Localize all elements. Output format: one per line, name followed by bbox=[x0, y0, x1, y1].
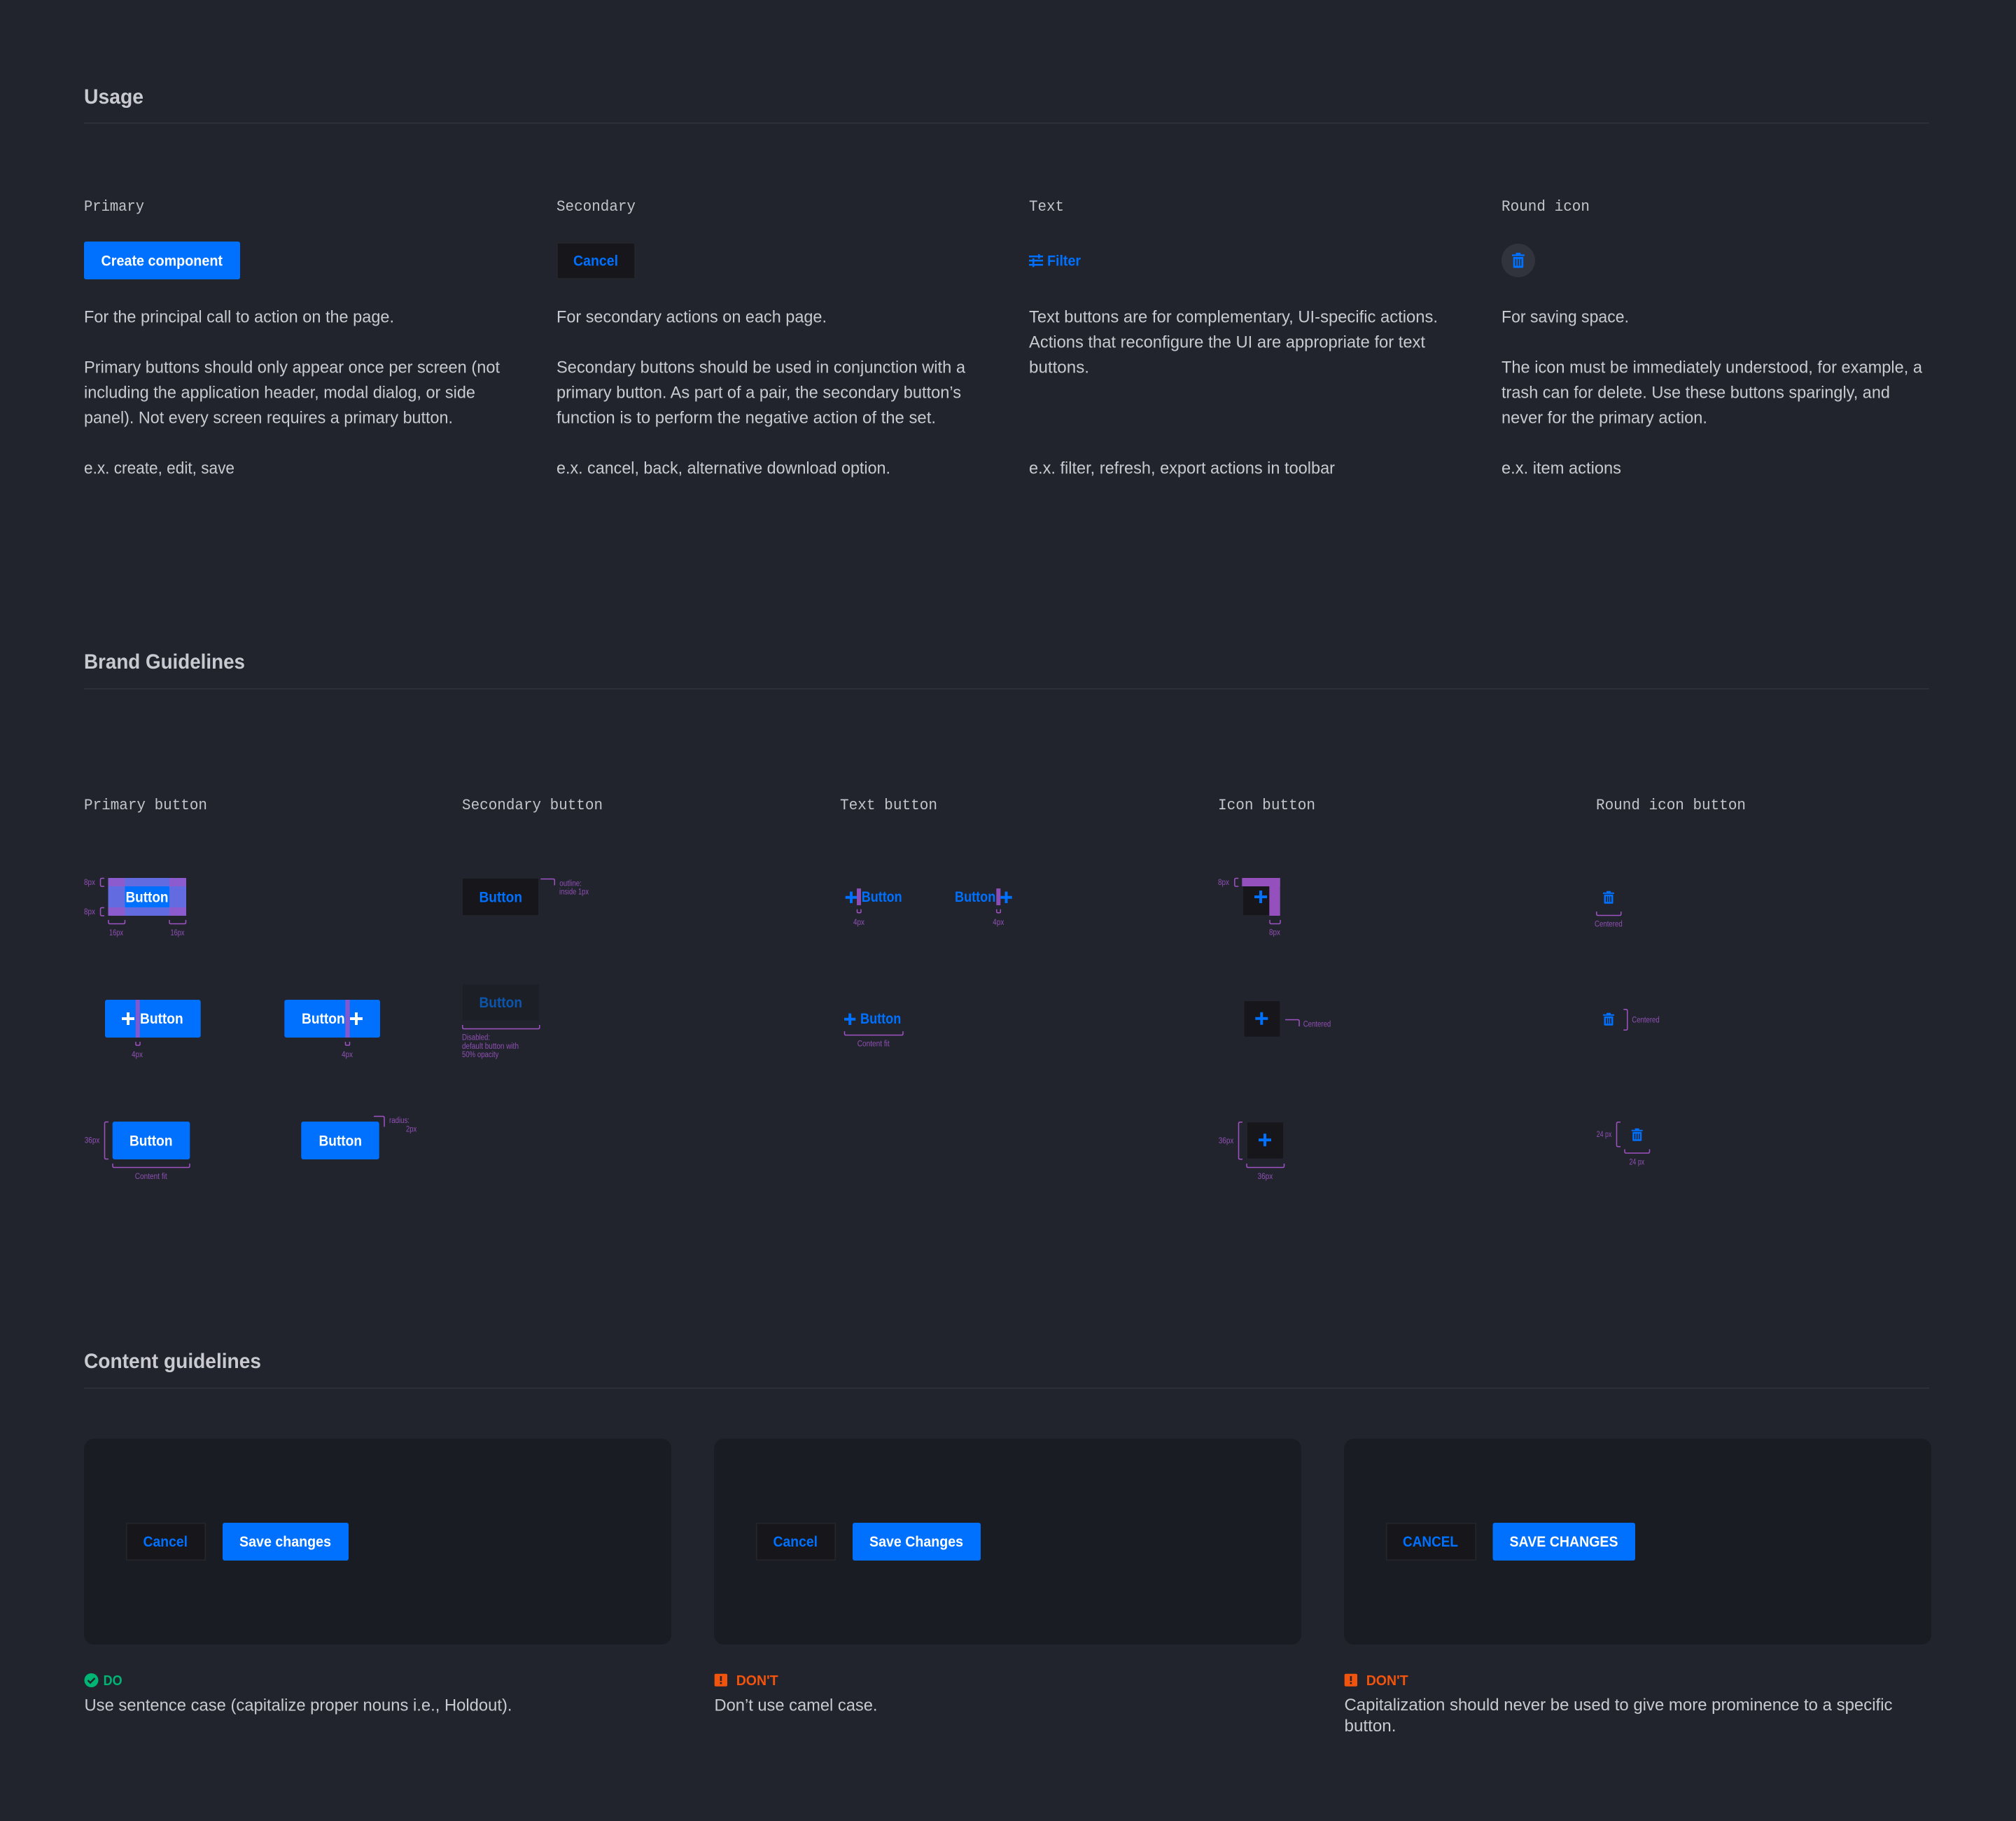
spec: height and content fit: Button bbox=[130, 1133, 172, 1150]
button: cancel: Cancel bbox=[773, 1534, 818, 1550]
spec: leading icon gap: 4px bbox=[132, 1051, 143, 1059]
section: content guidelines bbox=[84, 1350, 1931, 1736]
spec: leading icon gap: 4px bbox=[853, 919, 864, 927]
text: text button description: Actions that reconfigure the UI are appropriate for text bbox=[1029, 333, 1425, 351]
text: primary description bbox=[84, 308, 500, 477]
button: cancel: Cancel bbox=[143, 1534, 188, 1550]
heading: brand guidelines: Brand Guidelines bbox=[84, 650, 245, 674]
button: filter bbox=[1029, 253, 1081, 269]
text: primary description: For the principal call to action on the page. bbox=[84, 308, 394, 326]
text: don't description bbox=[1344, 1696, 1893, 1736]
button: save changes bbox=[223, 1523, 349, 1561]
spec: outline: Button bbox=[479, 889, 522, 906]
subheading: round icon: Round icon bbox=[1502, 198, 1590, 216]
text: don't description: Don’t use camel case. bbox=[714, 1696, 878, 1715]
subheading: secondary button: Secondary button bbox=[462, 797, 603, 814]
spec: disabled: Disabled: bbox=[462, 1033, 490, 1042]
spec: trailing icon gap bbox=[955, 888, 1012, 927]
spec: padding: 8px bbox=[84, 908, 95, 916]
text: text button description bbox=[1029, 308, 1438, 477]
spec: content fit: Content fit bbox=[858, 1040, 890, 1049]
spec: centered bbox=[1245, 1001, 1331, 1037]
text: text button description: buttons. bbox=[1029, 358, 1089, 377]
spec: radius: 2px bbox=[406, 1126, 417, 1134]
spec: size bbox=[1597, 1122, 1649, 1166]
panel: don't camel case bbox=[714, 1439, 1301, 1715]
text: don't description: button. bbox=[1344, 1717, 1396, 1736]
subheading: text: Text bbox=[1029, 198, 1064, 216]
button: cancel bbox=[127, 1523, 205, 1560]
spec: height and content fit: 36px bbox=[85, 1137, 100, 1145]
button: create component: Create component bbox=[101, 253, 223, 269]
spec: trailing icon gap: Button bbox=[302, 1011, 345, 1027]
spec: leading icon gap bbox=[846, 888, 902, 927]
panel: do sentence case bbox=[84, 1439, 671, 1715]
label: don't: DON'T bbox=[736, 1673, 778, 1689]
text: primary description: panel). Not every screen requires a primary button. bbox=[84, 409, 453, 427]
spec: size: 36px bbox=[1257, 1173, 1273, 1181]
spec: radius bbox=[301, 1116, 417, 1159]
text: text button description: e.x. filter, refresh, export actions in toolbar bbox=[1029, 459, 1335, 477]
column: text bbox=[1029, 198, 1438, 477]
subheading: primary button: Primary button bbox=[84, 797, 207, 814]
button: save changes uppercase bbox=[1492, 1523, 1635, 1561]
spec: outline: inside 1px bbox=[559, 888, 589, 896]
text: text button description: Text buttons are for complementary, UI-specific actions. bbox=[1029, 308, 1438, 326]
spec: padding: 16px bbox=[171, 929, 185, 937]
text: round icon description: never for the primary action. bbox=[1502, 409, 1707, 427]
subheading: icon button: Icon button bbox=[1218, 797, 1315, 814]
column: round icon bbox=[1502, 198, 1923, 477]
column: secondary button specs bbox=[462, 797, 603, 1059]
spec: content fit bbox=[844, 1011, 903, 1049]
spec: disabled: 50% opacity bbox=[462, 1051, 499, 1059]
spec: radius: Button bbox=[319, 1133, 362, 1150]
spec: centered horizontally bbox=[1595, 891, 1623, 929]
section: brand guidelines bbox=[84, 650, 1929, 1181]
button: cancel uppercase bbox=[1387, 1523, 1476, 1560]
heading: usage: Usage bbox=[84, 85, 144, 109]
spec: padding: 16px bbox=[109, 929, 123, 937]
subheading: primary: Primary bbox=[84, 198, 144, 216]
subheading: text button: Text button bbox=[840, 797, 937, 814]
text: round icon description: trash can for delete. Use these buttons sparingly, and bbox=[1502, 384, 1890, 402]
spec: trailing icon gap bbox=[284, 1000, 380, 1059]
spec: leading icon gap: Button bbox=[140, 1011, 183, 1027]
button: save changes uppercase: SAVE CHANGES bbox=[1509, 1534, 1618, 1550]
button: round trash icon bbox=[1502, 244, 1535, 277]
spec: radius: radius: bbox=[389, 1117, 410, 1125]
column: secondary bbox=[556, 198, 966, 477]
spec: icon padding: 8px bbox=[1218, 879, 1229, 887]
subheading: round icon button: Round icon button bbox=[1596, 797, 1746, 814]
label: do: DO bbox=[104, 1673, 122, 1689]
spec: size bbox=[1219, 1122, 1284, 1181]
icon: filter sliders bbox=[1029, 254, 1043, 267]
section: usage bbox=[84, 85, 1929, 477]
label: don't: DON'T bbox=[1366, 1673, 1408, 1689]
spec: centered: Centered bbox=[1303, 1020, 1331, 1028]
column: icon button specs bbox=[1218, 797, 1331, 1181]
text: secondary description: e.x. cancel, back, alternative download option. bbox=[556, 459, 890, 477]
spec: padding: 8px bbox=[84, 879, 95, 887]
spec: height and content fit bbox=[85, 1122, 190, 1181]
text: round icon description: e.x. item actions bbox=[1502, 459, 1621, 477]
spec: size: 24 px bbox=[1630, 1158, 1644, 1166]
label: don't bbox=[1345, 1673, 1408, 1689]
button: cancel uppercase: CANCEL bbox=[1403, 1534, 1458, 1550]
button: cancel bbox=[557, 243, 635, 279]
text: primary description: Primary buttons should only appear once per screen (not bbox=[84, 358, 500, 377]
text: secondary description bbox=[556, 308, 966, 477]
spec: trailing icon gap: 4px bbox=[342, 1051, 353, 1059]
spec: leading icon gap bbox=[105, 1000, 201, 1059]
text: secondary description: primary button. As part of a pair, the secondary button’s bbox=[556, 384, 961, 402]
label: do bbox=[84, 1673, 122, 1689]
subheading: secondary: Secondary bbox=[556, 198, 636, 216]
spec: leading icon gap: Button bbox=[862, 889, 902, 905]
spec: height and content fit: Content fit bbox=[135, 1173, 167, 1181]
button: save changes camel case bbox=[853, 1523, 981, 1561]
spec: padding: Button bbox=[126, 889, 168, 906]
spec: size: 36px bbox=[1219, 1137, 1234, 1145]
spec: padding bbox=[84, 878, 186, 937]
spec: content fit: Button bbox=[860, 1011, 901, 1027]
button: filter: Filter bbox=[1047, 253, 1081, 269]
text: round icon description bbox=[1502, 308, 1923, 477]
spec: centered horizontally: Centered bbox=[1595, 921, 1623, 929]
button: save changes camel case: Save Changes bbox=[869, 1534, 963, 1550]
column: text button specs bbox=[840, 797, 1012, 1049]
spec: centered vertically bbox=[1603, 1010, 1660, 1030]
text: secondary description: Secondary buttons should be used in conjunction with a bbox=[556, 358, 966, 377]
button: cancel: Cancel bbox=[573, 253, 618, 269]
spec: icon padding: 8px bbox=[1269, 928, 1280, 937]
spec: disabled: default button with bbox=[462, 1042, 519, 1051]
text: primary description: e.x. create, edit, save bbox=[84, 459, 234, 477]
spec: disabled bbox=[462, 984, 540, 1059]
text: don't description: Capitalization should never be used to give more prominence to a specific bbox=[1344, 1696, 1893, 1715]
text: do description: Use sentence case (capitalize proper nouns i.e., Holdout). bbox=[84, 1696, 512, 1715]
column: primary button specs bbox=[84, 797, 417, 1181]
spec: icon padding bbox=[1218, 878, 1280, 937]
column: primary bbox=[84, 198, 500, 477]
text: primary description: including the application header, modal dialog, or side bbox=[84, 384, 475, 402]
spec: trailing icon gap: 4px bbox=[993, 919, 1004, 927]
spec: centered vertically: Centered bbox=[1632, 1017, 1660, 1025]
spec: outline: outline: bbox=[559, 879, 582, 888]
column: round icon button specs bbox=[1595, 797, 1746, 1166]
label: don't bbox=[715, 1673, 778, 1689]
spec: trailing icon gap: Button bbox=[955, 889, 995, 905]
spec: outline bbox=[463, 879, 589, 915]
panel: don't capitalization bbox=[1344, 1439, 1931, 1736]
button: save changes: Save changes bbox=[239, 1534, 331, 1550]
button: cancel bbox=[757, 1523, 835, 1560]
button: create component bbox=[84, 242, 240, 279]
text: round icon description: The icon must be immediately understood, for example, a bbox=[1502, 358, 1923, 377]
spec: disabled: Button bbox=[479, 995, 522, 1011]
spec: size: 24 px bbox=[1597, 1131, 1612, 1139]
heading: content guidelines: Content guidelines bbox=[84, 1350, 261, 1373]
text: secondary description: For secondary actions on each page. bbox=[556, 308, 827, 326]
text: secondary description: function is to perform the negative action of the set. bbox=[556, 409, 936, 427]
text: round icon description: For saving space. bbox=[1502, 308, 1629, 326]
